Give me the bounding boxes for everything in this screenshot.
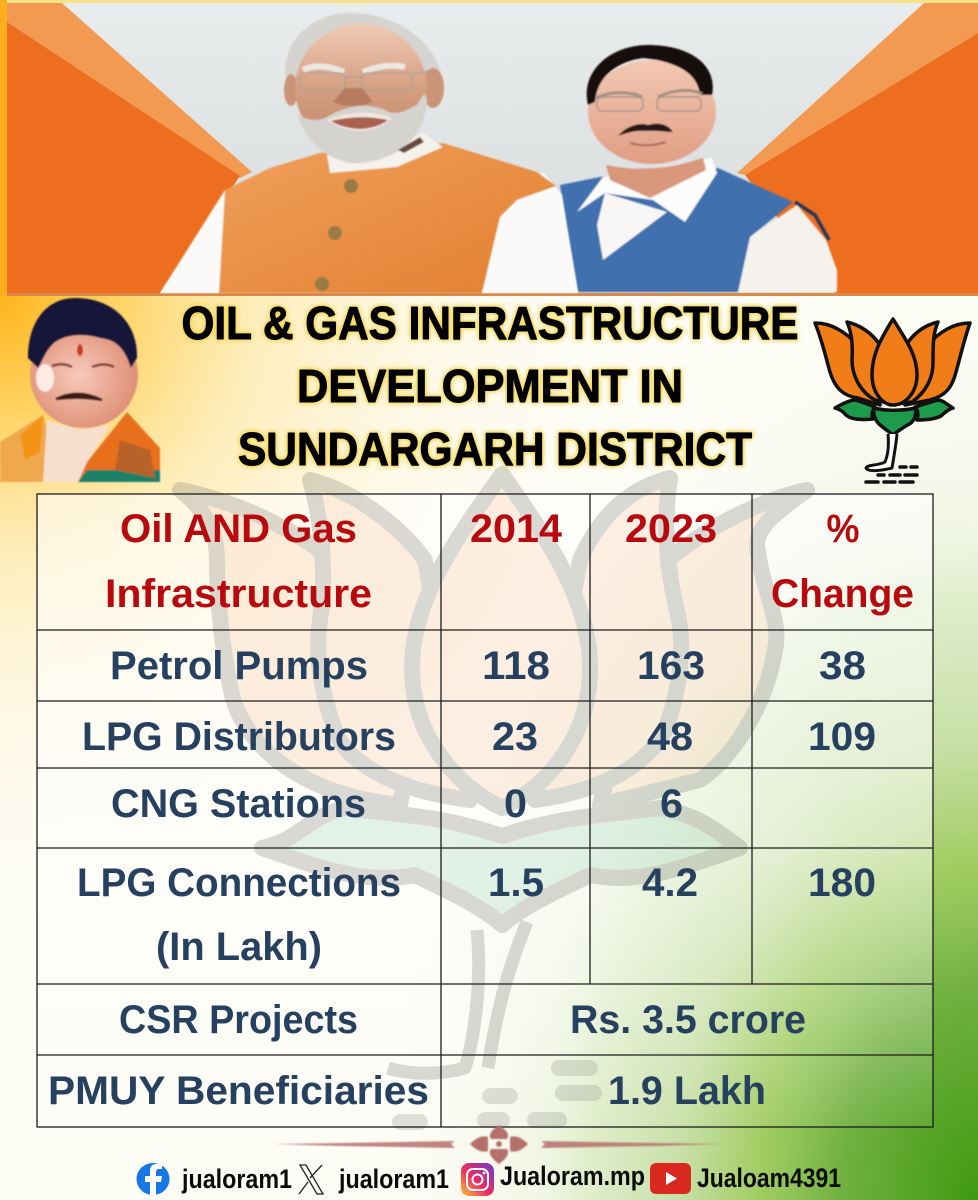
row: PMUY beneficiaries: PMUY Beneficiaries: [48, 1069, 429, 1113]
table header row: Infrastructure: [105, 572, 372, 616]
row: petrol pumps: 118: [482, 644, 550, 688]
icon: lotus emblem: [815, 319, 970, 482]
row: PMUY beneficiaries: [48, 1069, 766, 1113]
banner wall background: [7, 3, 978, 293]
table header row: Oil AND Gas: [120, 507, 357, 551]
row: CNG stations: CNG Stations: [111, 782, 366, 826]
lotus watermark: [180, 474, 807, 1073]
table header row: 2014: [470, 507, 563, 551]
table header row: %: [826, 507, 860, 551]
row: petrol pumps: 163: [637, 644, 705, 688]
title: SUNDARGARH DISTRICT: [238, 423, 752, 475]
watermark ground stripes: [392, 1060, 602, 1130]
social media footer: [136, 1161, 841, 1196]
title: DEVELOPMENT IN: [297, 360, 683, 412]
row: petrol pumps: 38: [819, 644, 866, 688]
left orange rays: [7, 3, 252, 293]
row: PMUY beneficiaries: 1.9 Lakh: [608, 1069, 766, 1113]
row: CNG stations: 6: [660, 782, 683, 826]
title: OIL & GAS INFRASTRUCTURE: [182, 297, 798, 349]
row: LPG distributors: 48: [647, 715, 693, 759]
table header row: Change: [771, 572, 914, 616]
banner photo: [0, 0, 978, 296]
row: LPG connections: (In Lakh): [156, 925, 322, 969]
row: LPG connections: LPG Connections: [77, 861, 401, 905]
row: LPG distributors: 23: [492, 715, 538, 759]
right orange rays: [737, 3, 978, 293]
row: LPG connections: 180: [808, 861, 876, 905]
row: LPG connections: 4.2: [642, 861, 698, 905]
title: [182, 297, 798, 475]
icon: X: [299, 1165, 323, 1194]
table header row: 2023: [625, 507, 717, 551]
table grid: [37, 494, 933, 1127]
handle: Instagram: Jualoram.mp: [500, 1161, 645, 1191]
row: petrol pumps: [110, 644, 866, 688]
handle: X: jualoram1: [338, 1164, 449, 1194]
table header row: [105, 507, 914, 616]
ornament divider: [274, 1125, 722, 1164]
photo: man in blue vest: [560, 45, 837, 292]
handle: Facebook: jualoram1: [181, 1164, 292, 1194]
icon: YouTube: [650, 1163, 691, 1194]
row: petrol pumps: Petrol Pumps: [110, 644, 368, 688]
row: LPG distributors: 109: [808, 715, 876, 759]
data table: [37, 494, 933, 1127]
row: CNG stations: 0: [504, 782, 527, 826]
row: LPG distributors: [82, 715, 876, 759]
photo: man in orange vest: [160, 13, 578, 293]
handle: YouTube: Jualoam4391: [697, 1163, 841, 1193]
row: LPG distributors: LPG Distributors: [82, 715, 396, 759]
icon: Instagram: [461, 1163, 494, 1196]
portrait: man with saffron scarf: [0, 298, 160, 482]
row: CNG stations: [111, 782, 683, 826]
row: LPG connections: 1.5: [488, 861, 544, 905]
row: CSR projects: [119, 998, 806, 1042]
row: CSR projects: Rs. 3.5 crore: [570, 998, 806, 1042]
icon: Facebook: [136, 1163, 170, 1195]
row: LPG connections: [77, 861, 876, 969]
table translucent panel: [37, 494, 933, 1127]
row: CSR projects: CSR Projects: [119, 998, 358, 1042]
